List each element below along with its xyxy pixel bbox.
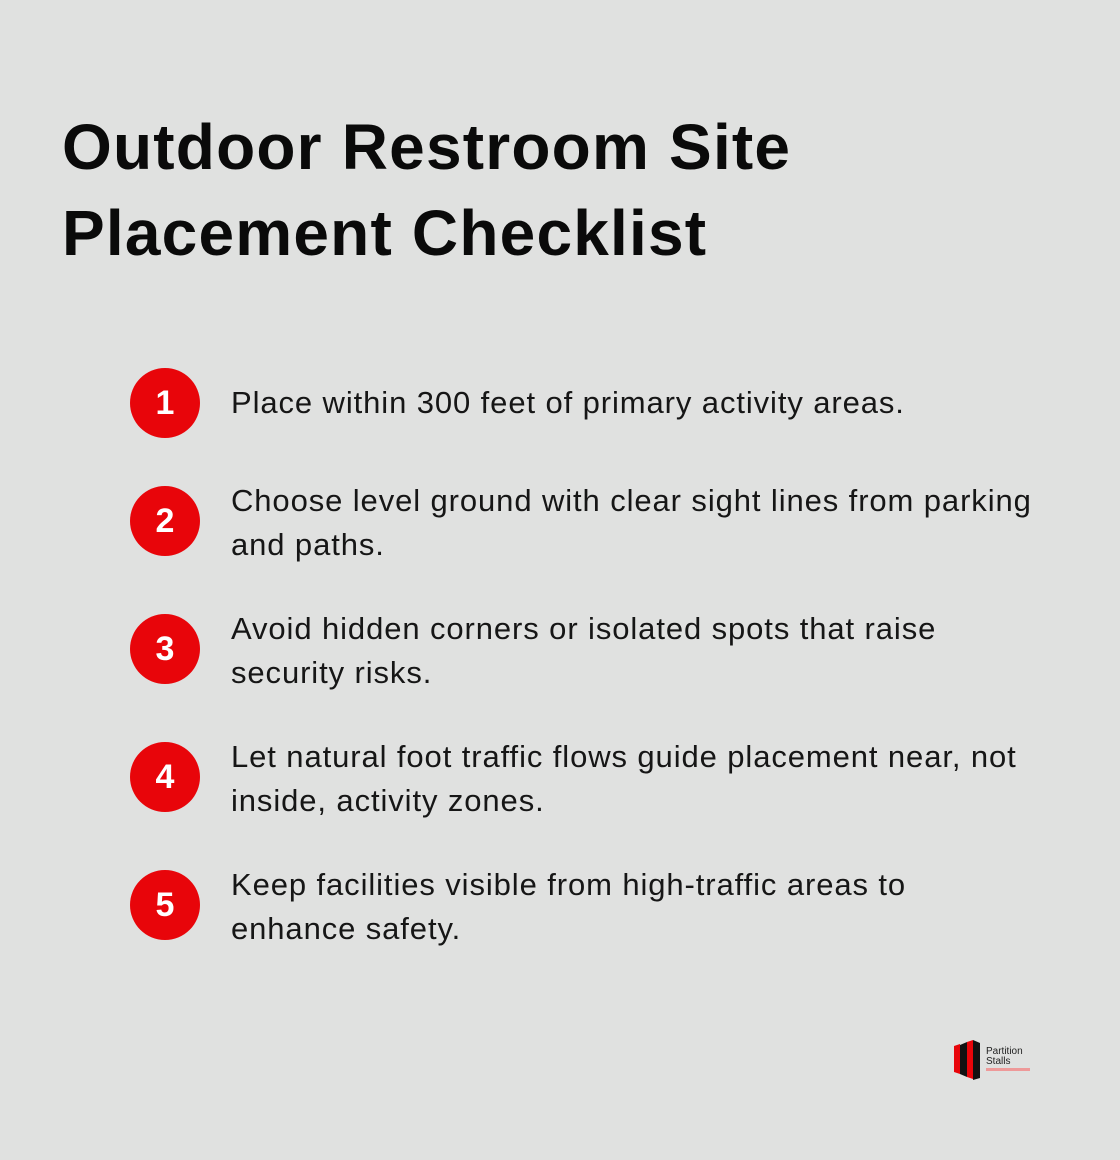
item 1 <box>130 368 905 438</box>
text 5 <box>231 867 906 946</box>
logo icon <box>954 1040 980 1080</box>
text 2 <box>231 483 1032 562</box>
badge 1: 1 <box>156 384 174 422</box>
title <box>62 111 791 269</box>
badge 3: 3 <box>156 630 174 668</box>
title: Outdoor Restroom Site <box>62 111 791 183</box>
text 2: Choose level ground with clear sight lines from parking <box>231 483 1032 518</box>
badge 4: 4 <box>156 758 174 796</box>
item 5 <box>130 867 906 946</box>
item 4 <box>130 739 1017 818</box>
logo text: Partition <box>986 1046 1023 1057</box>
logo <box>954 1040 1030 1080</box>
badge 2 <box>130 486 200 556</box>
text 3 <box>231 611 936 690</box>
badge 5 <box>130 870 200 940</box>
text 5: Keep facilities visible from high-traffic areas to <box>231 867 906 902</box>
item 2 <box>130 483 1032 562</box>
text 3: Avoid hidden corners or isolated spots that raise <box>231 611 936 646</box>
item 3 <box>130 611 936 690</box>
text 4: inside, activity zones. <box>231 783 545 818</box>
title: Placement Checklist <box>62 197 707 269</box>
text 4: Let natural foot traffic flows guide placement near, not <box>231 739 1017 774</box>
logo text: Stalls <box>986 1056 1010 1067</box>
text 5: enhance safety. <box>231 911 461 946</box>
text 1: Place within 300 feet of primary activity areas. <box>231 385 905 420</box>
logo text <box>986 1046 1023 1067</box>
badge 3 <box>130 614 200 684</box>
badge 2: 2 <box>156 502 174 540</box>
text 3: security risks. <box>231 655 432 690</box>
text 2: and paths. <box>231 527 385 562</box>
badge 1 <box>130 368 200 438</box>
badge 4 <box>130 742 200 812</box>
text 4 <box>231 739 1017 818</box>
badge 5: 5 <box>156 886 174 924</box>
